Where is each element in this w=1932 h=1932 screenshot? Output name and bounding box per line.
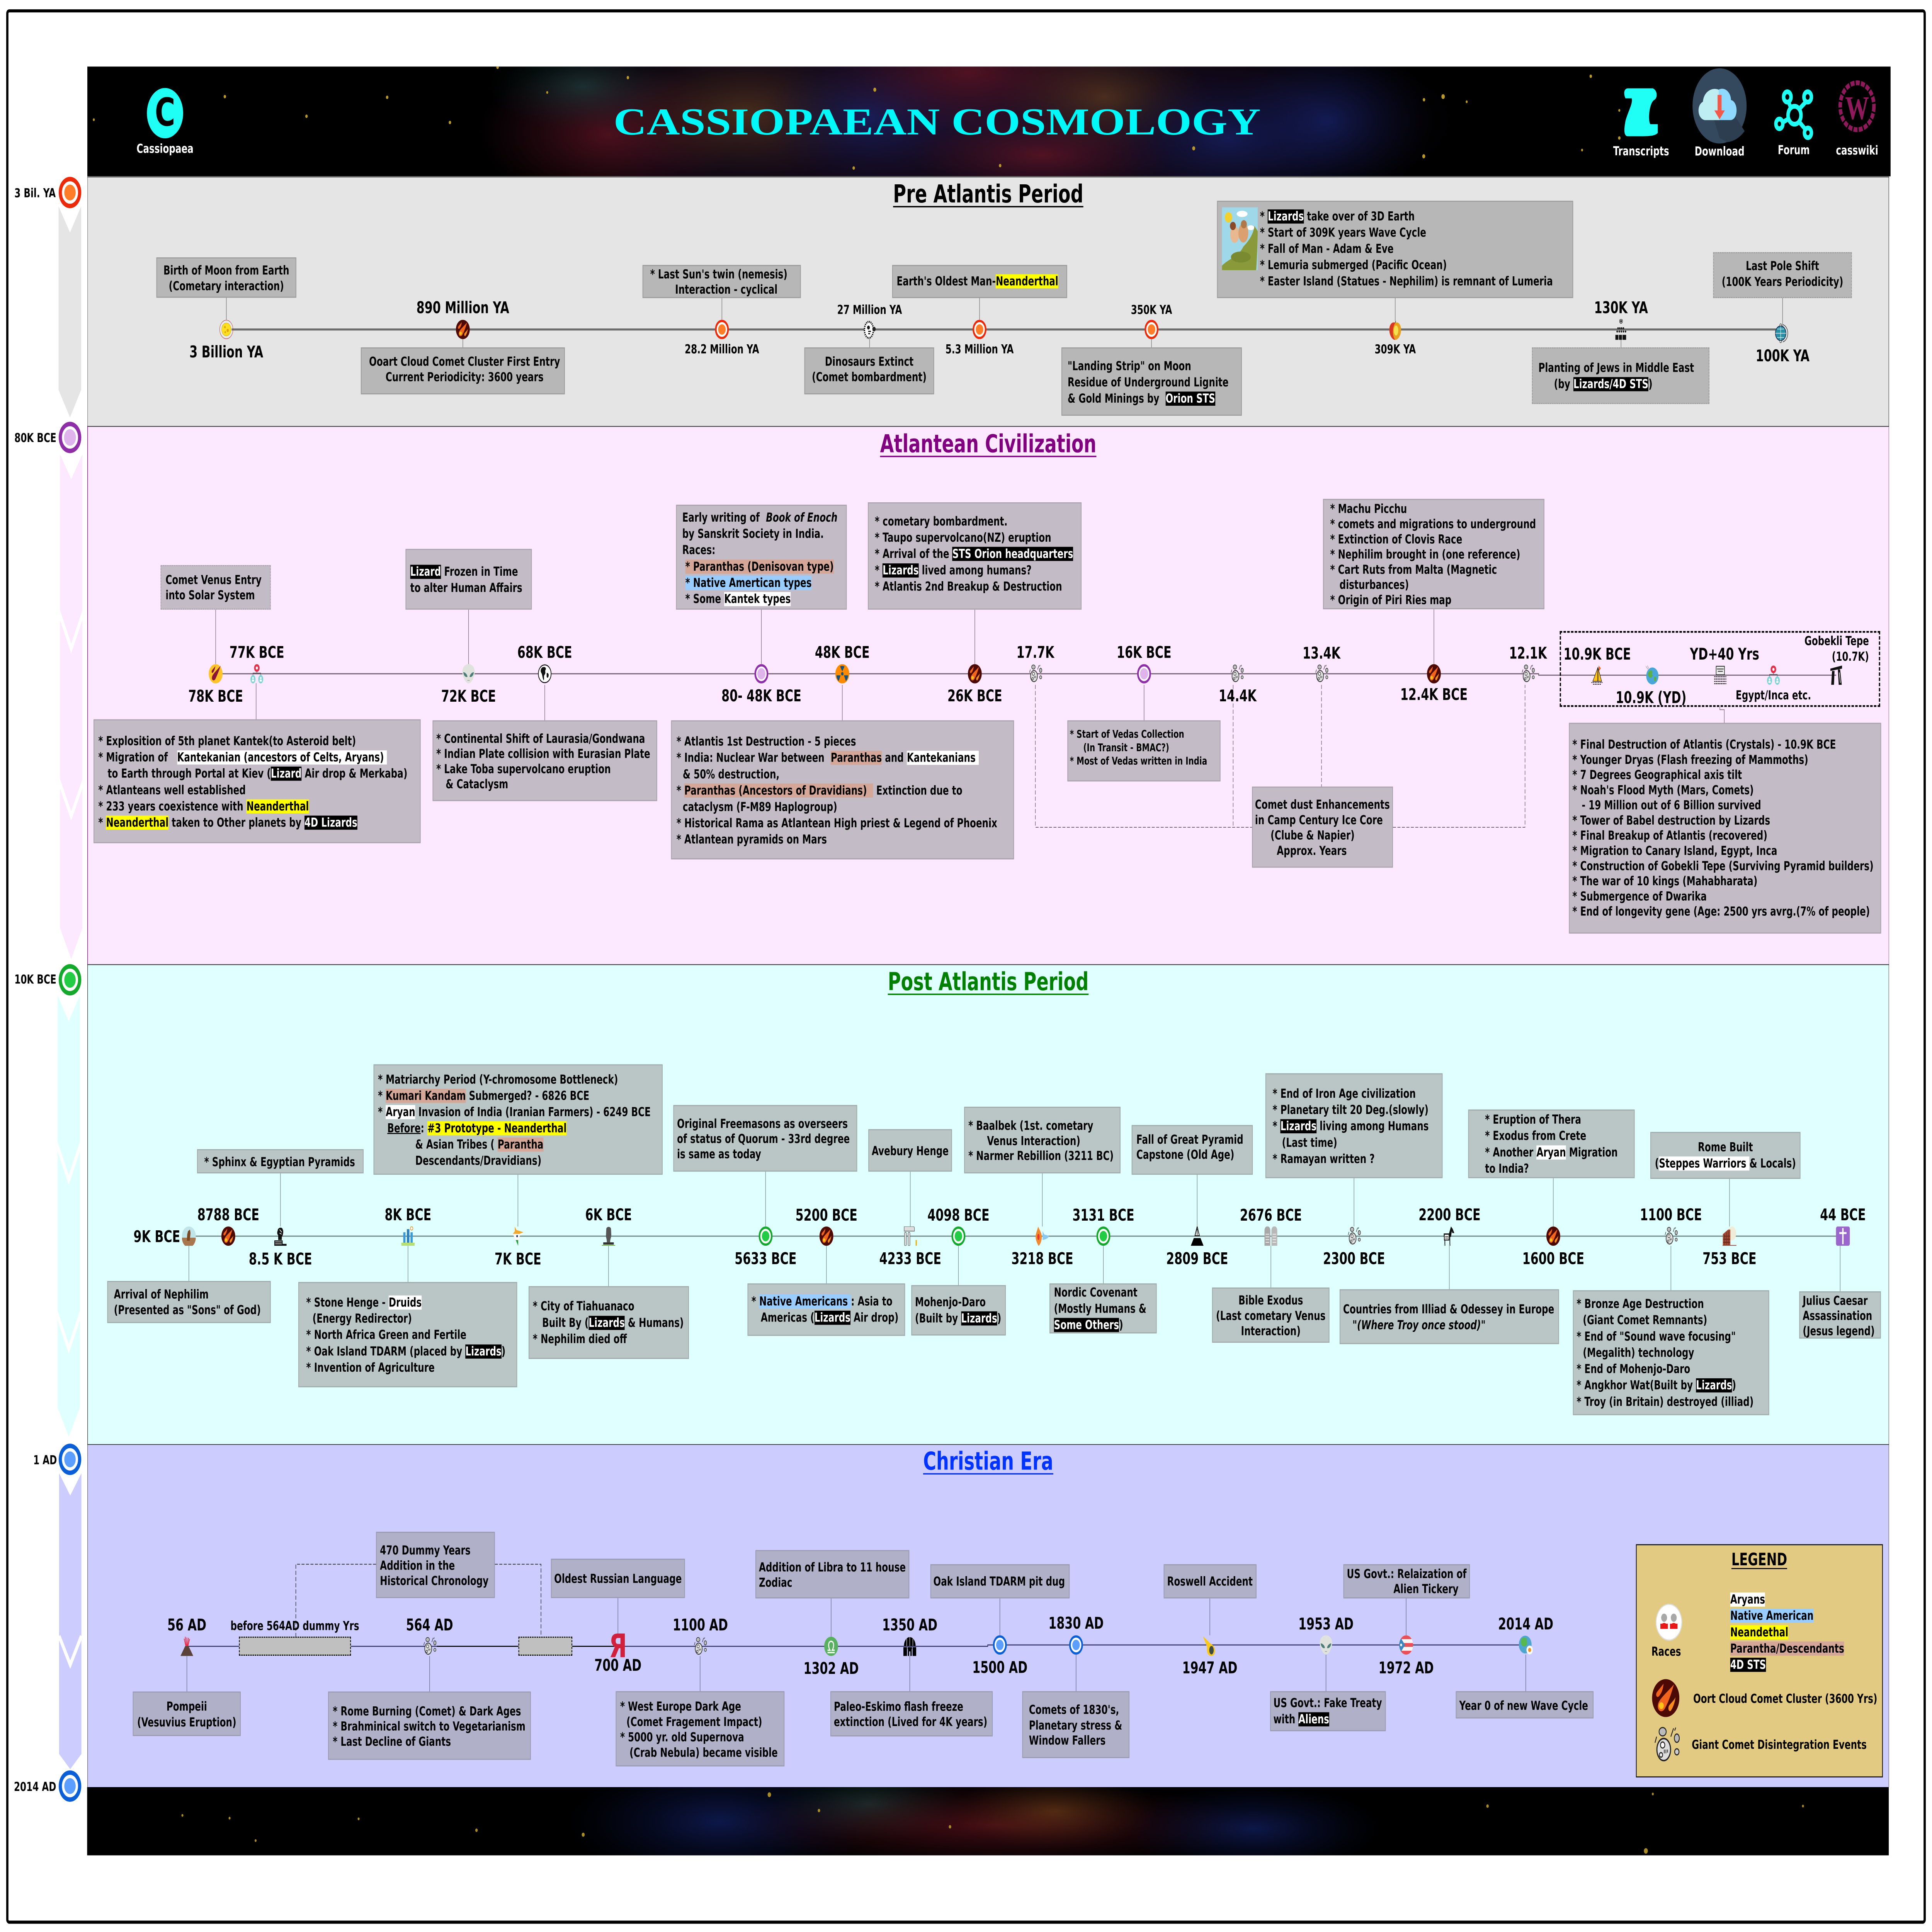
legend label: giant comet: Giant Comet Disintegration Events [1692, 1738, 1867, 1752]
box: Troy countries [1340, 1289, 1559, 1344]
icon: marker 1500 [994, 1636, 1006, 1653]
date: 350K YA: 350K YA [1131, 303, 1172, 317]
date: 5.3 Million YA: 5.3 Million YA [946, 342, 1014, 356]
box: lizards take over: * Lizards take over of 3D Earth * Start of 309K years Wave Cycle * Fall of Man - Adam & Eve * Lemuria submerged (Pacific Ocean) * Easter Island (Statues - Nephilim) is remnant of Lumeria [1260, 209, 1553, 288]
icon: casswiki wreath: W [1845, 89, 1869, 126]
date: 13.4K: 13.4K [1303, 644, 1340, 663]
box: Vedas [1067, 720, 1221, 781]
box: Comets of 1830 [1022, 1691, 1129, 1758]
icon: libra [824, 1637, 838, 1656]
date: 1600 BCE: 1600 BCE [1522, 1249, 1584, 1268]
box: Book of Enoch: Early writing of Book of Enoch by Sanskrit Society in India. Races: * Paranthas (Denisovan type) * Native Amertican types * Some Kantek types [682, 510, 837, 606]
date: 1100 BCE: 1100 BCE [1640, 1206, 1702, 1225]
box: Comet dust: Comet dust Enhancements in Camp Century Ice Core (Clube & Napier) Approx. Years [1255, 798, 1390, 858]
box: Oldest Russian [551, 1559, 685, 1598]
icon: volcano [180, 1637, 193, 1656]
marker: 2014 AD [60, 1773, 80, 1799]
box: dinosaurs: Dinosaurs Extinct (Comet bombardment) [812, 355, 927, 384]
axis label: 1 AD: 1 AD [33, 1453, 57, 1467]
icon: giant comet 12.1K [1522, 665, 1534, 682]
legend icon: comet [1652, 1679, 1679, 1717]
box: 470 dummy years: 470 Dummy Years Addition in the Historical Chronology [380, 1544, 488, 1588]
icon: marker 1830 [1070, 1636, 1082, 1653]
box: Mohenjo-Daro [911, 1285, 1006, 1335]
icon: Cassiopaea logo [147, 88, 183, 138]
icon: alien [463, 664, 475, 684]
box: Pompeii: Pompeii (Vesuvius Eruption) [137, 1699, 236, 1730]
box: Iron Age [1265, 1073, 1442, 1178]
panel: Atlantean Civilization [87, 426, 1889, 964]
box: landing strip: "Landing Strip" on Moon Residue of Underground Lignite & Gold Minings by Orion STS [1068, 359, 1228, 406]
date: 2200 BCE: 2200 BCE [1418, 1206, 1481, 1225]
marker dot: 80K [64, 429, 76, 446]
box: last pole shift [1713, 252, 1852, 298]
date: 44 BCE: 44 BCE [1820, 1206, 1866, 1225]
box: Comet Venus: Comet Venus Entry into Solar System [165, 573, 262, 602]
date: 1953 AD: 1953 AD [1298, 1615, 1354, 1634]
label: Transcripts: Transcripts [1613, 144, 1669, 158]
box: Nephilim arrival: Arrival of Nephilim (Presented as "Sons" of God) [114, 1287, 261, 1317]
box: 48K events: * Atlantis 1st Destruction - 5 pieces * India: Nuclear War between Paranthas and Kantekanians & 50% destruction, * Paranthas (Ancestors of Dravidians) Extinction due to cataclysm (F-M89 Haplogroup) * Historical Rama as Atlantean High priest & Legend of Phoenix * Atlantean pyramids on Mars [677, 735, 997, 847]
legend title: LEGEND [1731, 1549, 1787, 1570]
date: 77K BCE: 77K BCE [230, 643, 284, 662]
box: Nephilim arrival [107, 1281, 271, 1323]
box: Stone Henge: * Stone Henge - Druids (Energy Redirector) * North Africa Green and Fertile * Oak Island TDARM (placed by Lizards) * Invention of Agriculture [306, 1296, 505, 1375]
marker: 10K BCE [60, 966, 80, 993]
axis label: 2014 AD: 2014 AD [14, 1780, 56, 1794]
date: 100K YA: 100K YA [1756, 346, 1810, 366]
date: 10.9K (YD): 10.9K (YD) [1616, 688, 1686, 707]
icon: giant comet 14.4K [1231, 665, 1243, 682]
date: 5200 BCE: 5200 BCE [796, 1206, 857, 1225]
date: 10.9K BCE: 10.9K BCE [1564, 645, 1631, 664]
box: Sun's twin: * Last Sun's twin (nemesis) Interaction - cyclical [650, 267, 787, 297]
box: Comet Venus [161, 565, 271, 610]
icon: giant comet 564 [424, 1638, 436, 1654]
box: Fake Treaty: US Govt.: Fake Treaty with Aliens [1273, 1696, 1382, 1726]
box: Oldest Russian: Oldest Russian Language [554, 1572, 682, 1586]
footer banner [87, 1787, 1889, 1855]
dummy years block 1 [239, 1637, 351, 1656]
icon: gobekli pillars [1830, 665, 1842, 685]
heading: Post Atlantis Period: Post Atlantis Period [888, 967, 1088, 996]
date: 753 BCE: 753 BCE [1702, 1249, 1757, 1268]
date: 4098 BCE: 4098 BCE [927, 1206, 990, 1225]
icon: radiation [835, 664, 849, 684]
date: 5633 BCE: 5633 BCE [735, 1249, 797, 1268]
legend [1636, 1544, 1883, 1777]
icon: forum network [1776, 92, 1811, 138]
box: 26K events: * cometary bombardment. * Taupo supervolcano(NZ) eruption * Arrival of the STS Orion headquarters * Lizards lived among humans? * Atlantis 2nd Breakup & Destruction [875, 514, 1073, 594]
icon: earth 2014 [1519, 1636, 1533, 1655]
box: Nordic Covenant: Nordic Covenant (Mostly Humans & Some Others) [1054, 1286, 1146, 1332]
box: Matriarchy: * Matriarchy Period (Y-chromosome Bottleneck) * Kumari Kandam Submerged? - 6826 BCE * Aryan Invasion of India (Iranian Farmers) - 6249 BCE Before: #3 Prototype - Neanderthal & Asian Tribes ( Parantha Descendants/Dravidians) [378, 1073, 651, 1168]
box: Avebury: Avebury Henge [872, 1144, 949, 1158]
date: 1972 AD: 1972 AD [1379, 1658, 1434, 1677]
box: Paleo-Eskimo: Paleo-Eskimo flash freeze extinction (Lived for 4K years) [834, 1700, 987, 1729]
icon: US flag [1399, 1635, 1413, 1655]
date: 7K BCE: 7K BCE [495, 1250, 541, 1269]
icon: comet 12.4K [1427, 664, 1441, 684]
box: Tiahuanaco [529, 1286, 689, 1359]
icon: download cloud [1692, 68, 1747, 143]
icon: India [513, 1226, 524, 1246]
box: Great Pyramid [1132, 1125, 1253, 1175]
icon: giant comet 17.7K [1029, 665, 1042, 682]
date: 1100 AD: 1100 AD [673, 1616, 728, 1634]
icon: marker 80-48K [755, 665, 767, 682]
box: Freemasons: Original Freemasons as overseers of status of Quorum - 33rd degree is same as today [677, 1117, 850, 1161]
label: Cassiopaea: Cassiopaea [136, 142, 194, 156]
label: Forum: Forum [1778, 143, 1810, 157]
date: 16K BCE: 16K BCE [1117, 643, 1172, 662]
heading: Christian Era: Christian Era [923, 1447, 1053, 1476]
icon: comet 5200 [820, 1226, 833, 1246]
box: Pompeii [133, 1692, 241, 1736]
icon: marker 28.2M [716, 321, 728, 338]
box: Libra: Addition of Libra to 11 house Zodiac [759, 1560, 906, 1590]
icon: marker 3131 [1097, 1228, 1109, 1245]
box: Bible Exodus: Bible Exodus (Last cometary Venus Interaction) [1216, 1293, 1325, 1338]
header banner [87, 66, 1891, 176]
date: 68K BCE: 68K BCE [517, 643, 572, 662]
date: 12.4K BCE: 12.4K BCE [1400, 685, 1468, 704]
marker dot: 2014 AD [64, 1778, 76, 1794]
icon: Cassiopaea logo: C [155, 90, 175, 135]
box: Troy countries: Countries from Illiad & Odessey in Europe "(Where Troy once stood)" [1343, 1303, 1554, 1332]
box: Oak Island: Oak Island TDARM pit dug [934, 1575, 1065, 1589]
date: 9K BCE: 9K BCE [134, 1227, 180, 1246]
icon: comet 1600 [1546, 1226, 1560, 1246]
legend label: Oort cloud: Oort Cloud Comet Cluster (3600 Yrs) [1693, 1692, 1878, 1706]
box: birth of moon [156, 257, 296, 298]
box: Final destruction: * Final Destruction of Atlantis (Crystals) - 10.9K BCE * Younger Dryas (Flash freezing of Mammoths) * 7 Degrees Geographical axis tilt * Noah's Flood Myth (Mars, Comets) - 19 Million out of 6 Billion survived * Tower of Babel destruction by Lizards * Final Breakup of Atlantis (recovered) * Migration to Canary Island, Egypt, Inca * Construction of Gobekli Tepe (Surviving Pyramid builders) * The war of 10 kings (Mahabharata) * Submergence of Dwarika * End of longevity gene (Age: 2500 yrs avrg.(7% of people) [1572, 738, 1874, 919]
box: Great Pyramid: Fall of Great Pyramid Capstone (Old Age) [1136, 1133, 1243, 1162]
date: 309K YA: 309K YA [1374, 342, 1416, 356]
box: Sphinx [197, 1149, 364, 1173]
label: before 564AD dummy Yrs: before 564AD dummy Yrs [231, 1619, 359, 1633]
icon: henge [904, 1226, 917, 1246]
icon: apple [1389, 321, 1401, 340]
box: 470 dummy years [376, 1532, 495, 1598]
box: oldest man: Earth's Oldest Man-Neanderthal [896, 274, 1058, 288]
dummy years block 2 [519, 1637, 572, 1656]
box: Ooart cloud: Ooart Cloud Comet Cluster First Entry Current Periodicity: 3600 years [369, 355, 560, 384]
icon: races 77K [250, 664, 263, 684]
box: Rome [1650, 1132, 1801, 1179]
icon: colosseum [1723, 1226, 1736, 1246]
axis label: 80K BCE: 80K BCE [14, 431, 56, 445]
box: Bronze Age: * Bronze Age Destruction (Giant Comet Remnants) * End of "Sound wave focusing" (Megalith) technology * End of Mohenjo-Daro * Angkhor Wat(Built by Lizards) * Troy (in Britain) destroyed (illiad) [1577, 1297, 1753, 1409]
heading: Atlantean Civilization: Atlantean Civilization [880, 429, 1096, 458]
axis label: 3 Bil. YA: 3 Bil. YA [14, 186, 56, 201]
date: 2676 BCE: 2676 BCE [1240, 1206, 1302, 1225]
box: Roswell: Roswell Accident [1167, 1575, 1253, 1589]
date: 3131 BCE: 3131 BCE [1072, 1206, 1134, 1225]
box: Rome: Rome Built (Steppes Warriors & Locals) [1655, 1140, 1796, 1170]
icon: Venus comet [209, 664, 223, 684]
icon: marker 5.3M [973, 321, 986, 338]
box: Freemasons [673, 1105, 857, 1172]
icon: transcripts scroll [1624, 88, 1658, 136]
box: Native Americans [747, 1283, 905, 1336]
axis label: 10K BCE: 10K BCE [14, 973, 56, 987]
date: 12.1K: 12.1K [1509, 644, 1547, 663]
arrow: pre atlantis span [59, 206, 81, 417]
icon: pole shift globe [1776, 324, 1788, 343]
date: 1350 AD: 1350 AD [882, 1616, 937, 1634]
box: Iron Age: * End of Iron Age civilization * Planetary tilt 20 Deg.(slowly) * Lizards living among Humans (Last time) * Ramayan written ? [1273, 1087, 1429, 1166]
icon: marker 350K [1145, 321, 1158, 338]
marker: 3 billion years ago [60, 179, 80, 206]
icon: pyramid capstone [1191, 1226, 1204, 1246]
icon: giant comet 1100 AD [694, 1638, 707, 1654]
icon: cross [1836, 1226, 1850, 1246]
label: casswiki: casswiki [1836, 143, 1878, 158]
icon: giant comet 1100 [1665, 1227, 1677, 1244]
icon: moon [219, 320, 233, 339]
date: 4233 BCE: 4233 BCE [879, 1249, 941, 1268]
date: 700 AD: 700 AD [594, 1656, 641, 1675]
box: Stone Henge [298, 1282, 517, 1387]
box: Lizard frozen: Lizard Frozen in Time to alter Human Affairs [410, 565, 522, 595]
box: Ooart cloud [361, 347, 565, 395]
box: dinosaurs [804, 347, 934, 395]
icon: Baalbek [1036, 1226, 1049, 1246]
box: lizards take over [1217, 201, 1573, 298]
box: Comets of 1830: Comets of 1830's, Planetary stress & Window Fallers [1029, 1703, 1122, 1748]
icon: tablets [1264, 1226, 1277, 1246]
legend: race colour key: Aryans Native American Neandethal Parantha/Descendants 4D STS [1730, 1592, 1844, 1672]
date: 2300 BCE: 2300 BCE [1323, 1249, 1385, 1268]
box: landing strip [1061, 347, 1242, 416]
icon: trojan horse [1444, 1226, 1454, 1246]
date: 3 Billion YA: 3 Billion YA [189, 343, 263, 362]
date: 28.2 Million YA: 28.2 Million YA [685, 342, 759, 356]
date: 72K BCE: 72K BCE [441, 687, 496, 706]
box: 68K events: * Continental Shift of Laurasia/Gondwana * Indian Plate collision with Eurasian Plate * Lake Toba supervolcano eruption & Cataclysm [436, 732, 650, 791]
date: YD+40 Yrs: YD+40 Yrs [1690, 645, 1759, 664]
box: Avebury [868, 1129, 952, 1172]
date: 564 AD: 564 AD [406, 1616, 453, 1634]
date: 1302 AD: 1302 AD [803, 1659, 859, 1678]
box: last pole shift: Last Pole Shift (100K Years Periodicity) [1722, 259, 1843, 289]
box: Julius Caesar: Julius Caesar Assassination (Jesus legend) [1803, 1294, 1875, 1338]
box: Oak Island [930, 1564, 1070, 1599]
title: CASSIOPAEAN COSMOLOGY [614, 101, 1261, 143]
box: Thera: * Eruption of Thera * Exodus from Crete * Another Aryan Migration to India? [1485, 1112, 1618, 1176]
date: 26K BCE: 26K BCE [947, 687, 1002, 706]
box: Year 0: Year 0 of new Wave Cycle [1459, 1699, 1588, 1713]
box: Libra [755, 1550, 909, 1599]
box: Baalbek [964, 1107, 1121, 1173]
icon: giant comet 2300 [1348, 1227, 1361, 1244]
box: Rome Burning: * Rome Burning (Comet) & Dark Ages * Brahminical switch to Vegetarianism * Last Decline of Giants [333, 1704, 526, 1749]
icon: marker 5633 [760, 1228, 772, 1245]
heading: Pre Atlantis Period: Pre Atlantis Period [893, 179, 1083, 208]
box: Year 0 [1456, 1691, 1594, 1718]
nebula background [87, 66, 1891, 176]
icon: marker 4098 [952, 1228, 964, 1245]
box: Native Americans: * Native Americans : Asia to Americas (Lizards Air drop) [752, 1294, 898, 1325]
arrow: atlantean span [59, 454, 84, 959]
box: birth of moon: Birth of Moon from Earth (Cometary interaction) [163, 264, 289, 293]
box: Tiahuanaco: * City of Tiahuanaco Built By (Lizards & Humans) * Nephilim died off [533, 1299, 684, 1346]
icon: earth [1646, 665, 1658, 684]
panel: Christian Era [87, 1444, 1889, 1787]
box: planting of Jews: Planting of Jews in Middle East (by Lizards/4D STS) [1538, 361, 1694, 391]
date: 3218 BCE: 3218 BCE [1011, 1249, 1073, 1268]
icon: pyramid [1591, 665, 1603, 684]
label: Egypt/Inca etc.: Egypt/Inca etc. [1736, 688, 1811, 702]
icon: giant comet 13.4K [1316, 665, 1328, 682]
icon: Roswell comet [1203, 1637, 1215, 1656]
date: 6K BCE: 6K BCE [585, 1206, 632, 1225]
group box: 10.9K BCE events [1560, 631, 1880, 707]
icon: people [1616, 319, 1626, 340]
arrow: post atlantis span [56, 995, 82, 1437]
box: Mohenjo-Daro: Mohenjo-Daro (Built by Lizards) [915, 1295, 1001, 1325]
date: 1830 AD: 1830 AD [1048, 1614, 1104, 1633]
box: oldest man [892, 265, 1067, 298]
icon: races migration [1767, 665, 1780, 685]
icon: comet 8788 [221, 1226, 235, 1246]
date: 1500 AD: 1500 AD [972, 1658, 1027, 1677]
box: Lizard frozen [405, 549, 532, 610]
arrow: christian era span [59, 1473, 82, 1769]
date: 8788 BCE: 8788 BCE [197, 1206, 259, 1225]
box: Machu Picchu: * Machu Picchu * comets and migrations to underground * Extinction of Clovis Race * Nephilim brought in (one reference) * Cart Ruts from Malta (Magnetic disturbances) * Origin of Piri Ries map [1330, 502, 1536, 607]
legend icon: giant comet [1655, 1728, 1679, 1760]
icon: Nephilim statue [182, 1226, 196, 1247]
icon: marker 16K [1138, 665, 1150, 682]
icon: igloo [903, 1637, 916, 1656]
icon: babel tower [1714, 666, 1726, 684]
marker: 80K BCE [60, 424, 80, 451]
box: Paleo-Eskimo [830, 1691, 993, 1736]
box: Vedas: * Start of Vedas Collection (In Transit - BMAC?) * Most of Vedas written in India [1070, 728, 1207, 767]
icon: casswiki wreath [1840, 83, 1874, 130]
box: Baalbek: * Baalbek (1st. cometary Venus Interaction) * Narmer Rebillion (3211 BC) [968, 1119, 1114, 1163]
date: 48K BCE: 48K BCE [815, 643, 870, 662]
icon: sphinx [274, 1228, 287, 1246]
date: 56 AD: 56 AD [167, 1616, 206, 1634]
date: 2809 BCE: 2809 BCE [1166, 1249, 1228, 1268]
date: 8.5 K BCE: 8.5 K BCE [249, 1250, 312, 1269]
icon: globe [538, 665, 551, 683]
date: 80-48K BCE: 80- 48K BCE [721, 687, 801, 706]
box: Rome Burning [328, 1692, 531, 1760]
box: 77K events: * Explosition of 5th planet Kantek(to Asteroid belt) * Migration of Kantekanian (ancestors of Celts, Aryans) to Earth through Portal at Kiev (Lizard Air drop & Merkaba) * Atlanteans well established * 233 years coexistence with Neanderthal * Neanderthal taken to Other planets by 4D Lizards [98, 734, 407, 830]
icon: comet 26K [968, 664, 982, 684]
box: Roswell [1164, 1564, 1257, 1599]
icon: dinosaur comet [864, 322, 876, 338]
panel: Pre Atlantis Period [87, 177, 1889, 426]
date: 17.7K: 17.7K [1017, 643, 1054, 662]
date: 2014 AD: 2014 AD [1498, 1615, 1553, 1634]
date: 8K BCE: 8K BCE [385, 1206, 431, 1225]
date: 130K YA: 130K YA [1594, 298, 1648, 317]
box: Sphinx: * Sphinx & Egyptian Pyramids [204, 1155, 355, 1169]
legend label: Races: Races [1651, 1645, 1681, 1659]
marker dot: 3 billion [64, 185, 76, 201]
thumbnail: Adam and Eve with serpent [1222, 207, 1258, 270]
panel: Post Atlantis Period [87, 964, 1889, 1444]
icon: moai [602, 1227, 615, 1246]
box: West Europe: * West Europe Dark Age (Comet Fragement Impact) * 5000 yr. old Supernova (Crab Nebula) became visible [620, 1699, 778, 1760]
box: 26K events [868, 502, 1082, 610]
box: Alien Tickery: US Govt.: Relaization of Alien Tickery [1347, 1567, 1466, 1596]
icon: comet cluster [456, 320, 470, 339]
legend icon: races [1656, 1604, 1682, 1640]
date: 27 Million YA: 27 Million YA [837, 303, 902, 317]
date: 78K BCE: 78K BCE [188, 687, 243, 706]
box: planting of Jews [1532, 347, 1709, 404]
date: 14.4K: 14.4K [1219, 687, 1257, 706]
icon: alien 1953 [1320, 1635, 1332, 1655]
marker dot: 10K [64, 972, 76, 988]
marker dot: 1 AD [64, 1451, 76, 1467]
left era axis [12, 176, 83, 1804]
date: 1947 AD: 1947 AD [1182, 1658, 1237, 1677]
icon: Stone Henge towers [401, 1227, 415, 1246]
label: Gobekli Tepe: Gobekli Tepe (10.7K) [1804, 634, 1869, 664]
marker: 1 AD [60, 1446, 80, 1473]
date: 890 Million YA: 890 Million YA [417, 298, 509, 317]
icon: Cyrillic Ya: Я [609, 1628, 627, 1665]
label: Download: Download [1695, 145, 1745, 159]
